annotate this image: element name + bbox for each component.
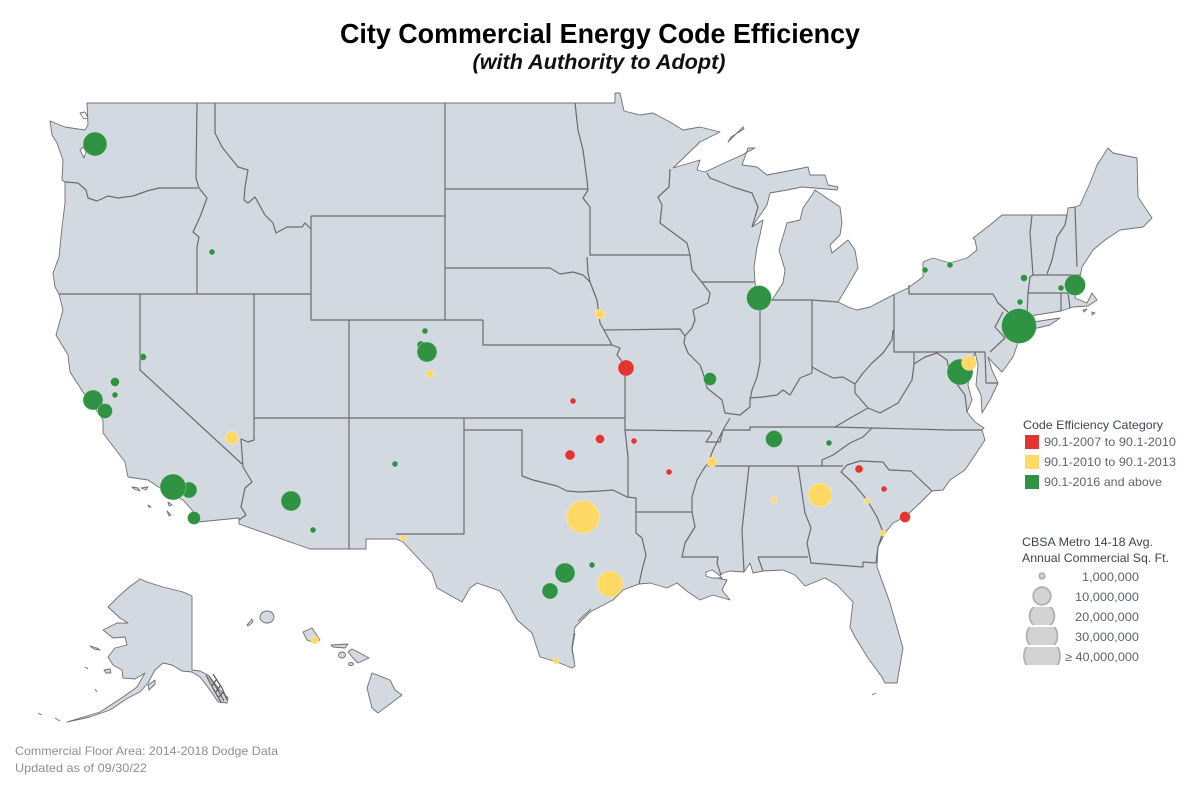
size labels: 1,000,000 <box>1082 570 1139 584</box>
subtitle: (with Authority to Adopt) <box>472 51 726 74</box>
legend item: yellow: 90.1-2010 to 90.1-2013 <box>1044 455 1176 469</box>
map: Alaska <box>38 579 228 722</box>
source note: Updated as of 09/30/22 <box>15 761 147 775</box>
source note: Commercial Floor Area: 2014-2018 Dodge Data <box>15 744 278 758</box>
legend item: green: 90.1-2016 and above <box>1044 475 1162 489</box>
title: City Commercial Energy Code Efficiency <box>340 18 861 49</box>
size labels: 20,000,000 <box>1075 610 1139 624</box>
size labels: ≥ 40,000,000 <box>1065 650 1139 664</box>
bubbles: metro areas, 90.1-2007 to 90.1-2010 <box>565 360 910 522</box>
size labels: 30,000,000 <box>1075 630 1139 644</box>
legend item: red: 90.1-2007 to 90.1-2010 <box>1044 435 1176 449</box>
legend: bubble size <box>1022 535 1169 674</box>
legend: code efficiency category <box>1023 418 1176 489</box>
bubbles: metro areas, 90.1-2016 and above <box>83 132 1086 599</box>
size labels: 10,000,000 <box>1075 590 1139 604</box>
size symbols <box>1024 573 1060 674</box>
legend title: Code Efficiency Category <box>1023 418 1163 432</box>
state borders <box>59 103 1080 584</box>
map: Hawaii <box>247 611 402 713</box>
size labels <box>1065 570 1139 664</box>
map: contiguous United States <box>50 93 1152 695</box>
bubbles: metro areas, 90.1-2010 to 90.1-2013 <box>226 309 976 664</box>
legend title: CBSA Metro 14-18 Avg. <box>1022 535 1153 549</box>
legend title: Annual Commercial Sq. Ft. <box>1022 551 1169 565</box>
